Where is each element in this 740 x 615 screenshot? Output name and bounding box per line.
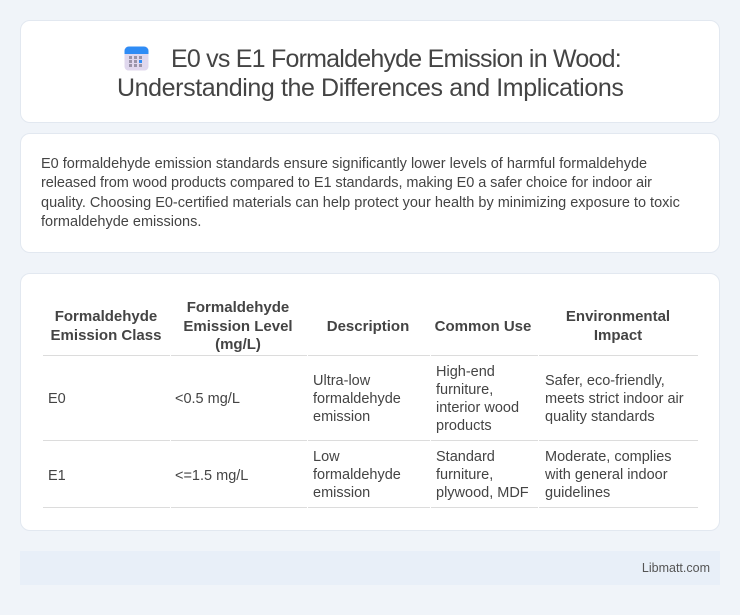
row: E0: emission: [313, 409, 370, 425]
intro text panel: [20, 133, 720, 253]
row: E1: furniture,: [436, 467, 493, 483]
row: E0: meets strict indoor air: [545, 391, 684, 407]
intro paragraph: E0 formaldehyde emission standards ensure significantly lower levels of harmful formaldehyde: [41, 156, 647, 172]
row: E1: E1: [48, 468, 66, 484]
row: E0: Ultra-low: [313, 373, 370, 389]
title: Understanding the Differences and Implications: [117, 74, 623, 102]
row: E1: [48, 449, 672, 501]
row: E0: interior wood: [436, 400, 519, 416]
table header: Formaldehyde: [187, 299, 289, 316]
table header: Formaldehyde: [55, 308, 157, 325]
row: E1: Low: [313, 449, 340, 465]
title panel: [20, 20, 720, 123]
row: E1: guidelines: [545, 485, 610, 501]
table header: (mg/L): [215, 336, 261, 353]
table header: Emission Level: [183, 318, 293, 335]
row: E0: [48, 364, 684, 434]
row: E1: Standard: [436, 449, 495, 465]
row: E1: <=1.5 mg/L: [175, 468, 248, 484]
table panel: [20, 273, 720, 531]
table header: Description: [327, 318, 409, 335]
row: E0: quality standards: [545, 409, 655, 425]
intro paragraph: quality. Choosing E0-certified materials can help protect your health by minimizing exposure to toxic: [41, 195, 680, 211]
row: E0: furniture,: [436, 382, 493, 398]
table header: Environmental: [566, 308, 670, 325]
table header: [51, 299, 670, 353]
row: E0: Safer, eco-friendly,: [545, 373, 665, 389]
table header: Impact: [594, 327, 642, 344]
icon: calendar: [124, 46, 148, 70]
row: E0: formaldehyde: [313, 391, 401, 407]
intro paragraph: released from wood products compared to E1 standards, making E0 a safer choice for indoor air: [41, 175, 652, 191]
row: E0: E0: [48, 391, 66, 407]
row: E1: emission: [313, 485, 370, 501]
row: E0: products: [436, 418, 492, 434]
footer credit: Libmatt.com: [642, 561, 710, 575]
title: E0 vs E1 Formaldehyde Emission in Wood:: [171, 45, 621, 73]
row: E1: formaldehyde: [313, 467, 401, 483]
intro paragraph: formaldehyde emissions.: [41, 214, 201, 230]
row: E0: <0.5 mg/L: [175, 391, 240, 407]
row: E0: High-end: [436, 364, 495, 380]
row: E1: plywood, MDF: [436, 485, 529, 501]
row: E1: with general indoor: [545, 467, 668, 483]
footer bar: [20, 551, 720, 585]
title: [117, 45, 623, 102]
table header: Common Use: [435, 318, 531, 335]
intro paragraph: [41, 156, 680, 230]
table header: Emission Class: [51, 327, 161, 344]
row: E1: Moderate, complies: [545, 449, 672, 465]
